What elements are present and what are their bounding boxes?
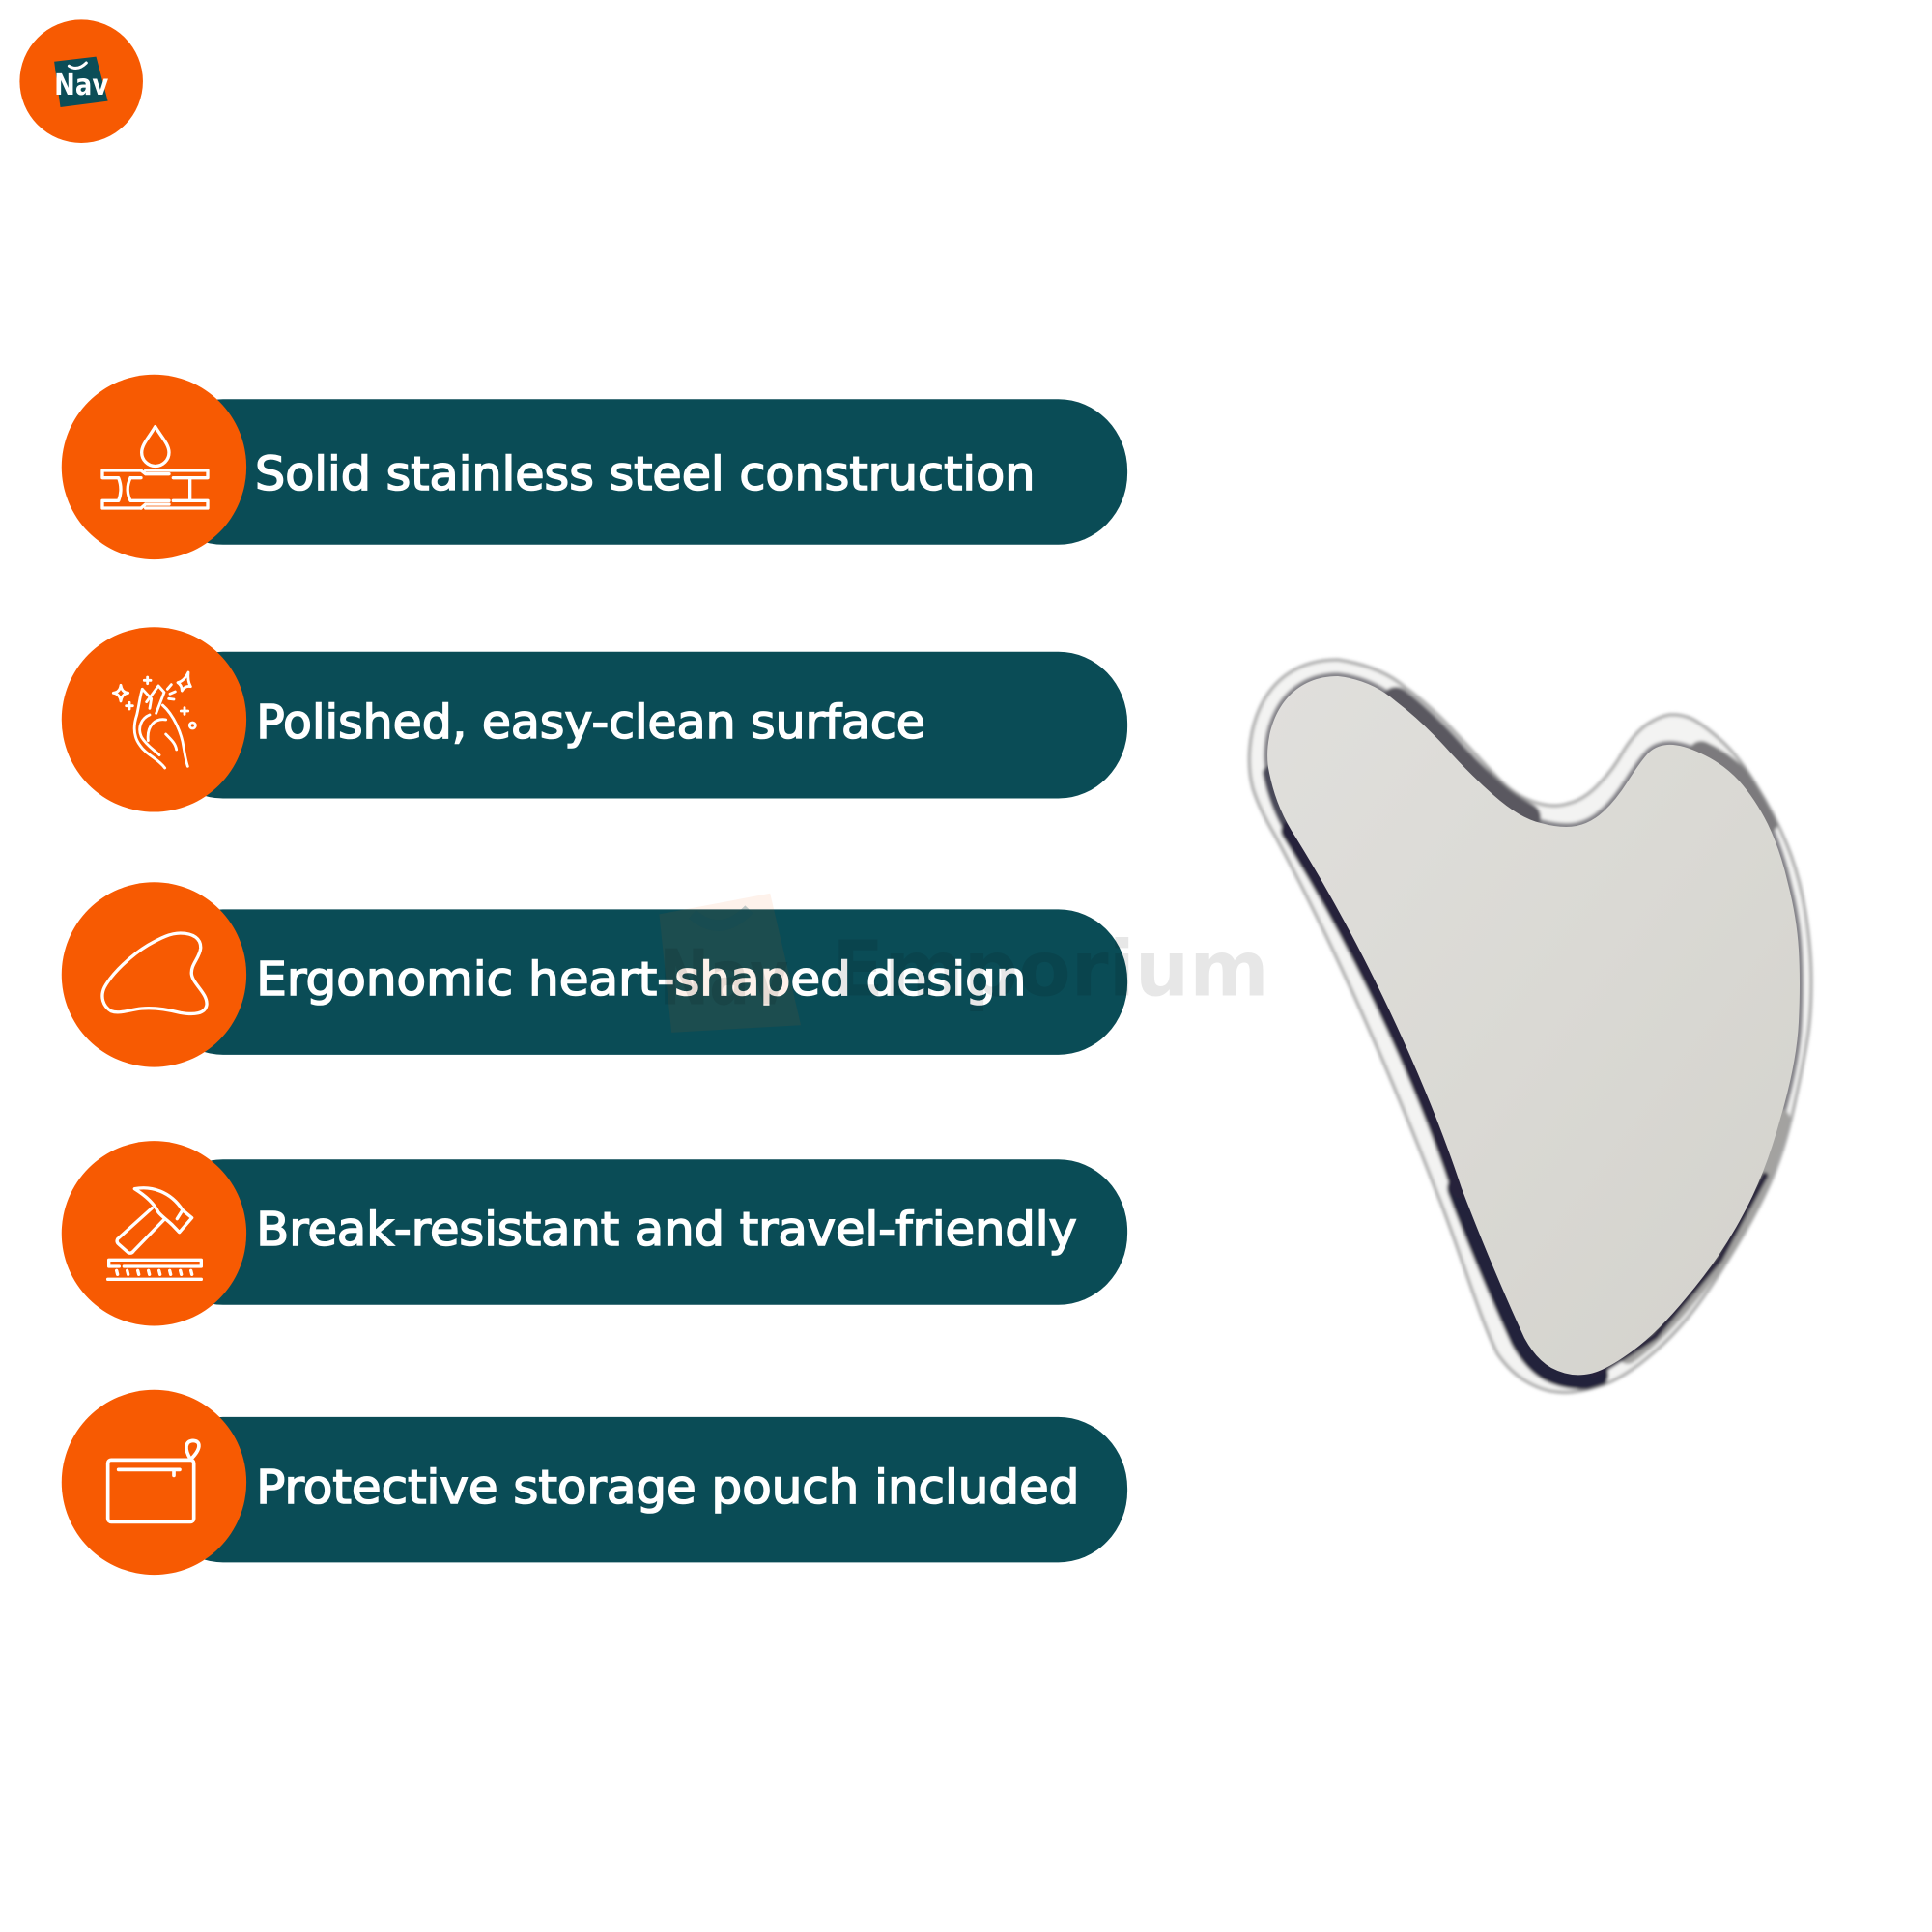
feature row: solid stainless steel	[62, 375, 1127, 559]
icon: gua sha outline	[102, 933, 207, 1013]
feature row: heart-shaped design	[62, 882, 1127, 1067]
feature row: break-resistant	[62, 1141, 1127, 1325]
icon: hammer on surface	[108, 1188, 201, 1279]
watermark bag	[659, 894, 801, 1033]
logo badge: Nav	[54, 69, 108, 102]
logo badge	[19, 19, 143, 143]
feature row: storage pouch: Protective storage pouch included	[256, 1461, 1079, 1515]
watermark: Nav Emporium: Emporium	[832, 925, 1269, 1014]
metal rim	[1249, 660, 1811, 1392]
product image: metal gua sha	[1249, 660, 1811, 1392]
icon: droplet on steel beam	[102, 427, 208, 508]
feature row: polished surface: Polished, easy-clean surface	[256, 696, 925, 750]
polished face	[1267, 676, 1800, 1375]
icon: finger snap with sparkles	[113, 672, 195, 768]
feature row: storage pouch	[62, 1390, 1127, 1575]
watermark text: Nav	[659, 934, 788, 1023]
feature row: solid stainless steel: Solid stainless steel construction	[255, 447, 1035, 501]
feature row: polished surface	[62, 627, 1127, 812]
feature row: break-resistant: Break-resistant and travel-friendly	[256, 1203, 1077, 1257]
icon: zip pouch	[108, 1440, 199, 1521]
base edge line under every band	[1262, 670, 1805, 1113]
watermark: Nav Emporium	[659, 894, 1269, 1033]
feature row: heart-shaped design: Ergonomic heart-shaped design	[256, 952, 1026, 1007]
